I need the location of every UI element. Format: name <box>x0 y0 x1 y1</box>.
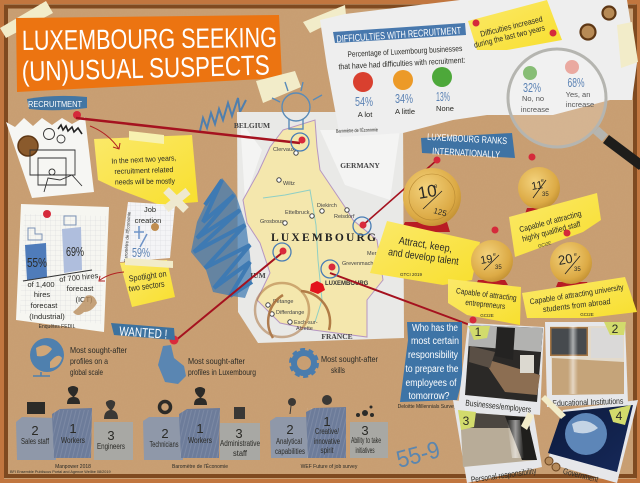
map: city names: Alzette <box>296 326 313 332</box>
block: creative innovative spirit: 1 <box>323 414 331 429</box>
icon: team <box>356 406 374 417</box>
medal: 11th of 35 <box>518 154 560 214</box>
icon: admin <box>234 407 245 419</box>
note tape <box>125 258 173 268</box>
scribble: 55-9: 55-9 <box>394 436 443 474</box>
wanted banner: WANTED ! <box>119 323 168 342</box>
icon: worker 1 <box>67 386 80 404</box>
tape: top centre <box>303 5 346 33</box>
text: global profiles <box>70 345 127 377</box>
icon: orange face <box>393 70 413 90</box>
stat: a lot: A lot <box>358 110 373 119</box>
source: Deloitte Millennials Survey <box>398 404 457 410</box>
tape: over title <box>256 71 301 103</box>
block: technicians <box>143 417 183 460</box>
block: workers: Workers <box>61 436 85 445</box>
pin: chart <box>43 210 51 218</box>
note text <box>111 153 177 187</box>
map: river <box>263 190 322 322</box>
arrow: to yellow note <box>90 126 120 149</box>
chart labels: of 1,400 <box>27 280 55 289</box>
job creation paper: 59% <box>132 245 150 260</box>
bar icons <box>28 216 76 240</box>
stat: none: None <box>436 104 454 113</box>
red strings <box>76 118 470 341</box>
block: engineers: 3 <box>107 428 115 443</box>
panel: who has the most responsibility: responsibility <box>408 350 458 361</box>
yellow note: highly qualified staff: GCI2E <box>537 240 552 249</box>
block: creative innovative spirit: Creative/ <box>315 427 340 436</box>
photo: government <box>547 400 638 483</box>
magnifier <box>508 49 640 166</box>
source: Baromètre de l'Économie <box>336 126 378 135</box>
stat: no increase <box>521 80 549 114</box>
title line 2: (UN)USUAL SUSPECTS <box>21 50 270 87</box>
map pins with blue circles <box>170 133 371 344</box>
yellow note: highly qualified staff: Capable of attracting <box>518 209 582 234</box>
coffee stain <box>18 136 38 156</box>
chart labels: of 700 hires <box>59 271 99 284</box>
number tag: 3 <box>463 414 470 428</box>
medal: 20th of 35 <box>550 230 592 287</box>
map: city names: Mer <box>367 251 377 257</box>
lens <box>508 49 606 147</box>
job creation paper: Job <box>144 205 156 214</box>
block: workers: Workers <box>188 436 212 445</box>
chart labels: (ICT) <box>75 295 93 304</box>
source: Baromètre de l'Économie <box>172 463 228 470</box>
photo: educational institutions <box>545 322 628 408</box>
photo: businesses / employers <box>458 323 544 415</box>
job creation paper: Baromètre de l'Économie <box>122 211 132 262</box>
icon: green face <box>432 67 452 87</box>
title banner <box>16 15 282 92</box>
panel: who has the most responsibility: tomorrow? <box>408 391 450 402</box>
stat: a lot: 54% <box>355 94 373 109</box>
map: city markers <box>266 151 349 324</box>
title line 1: LUXEMBOURG SEEKING <box>22 22 277 56</box>
map: country area <box>243 120 383 337</box>
map: country labels <box>234 121 380 341</box>
copyright line: BFI Ensemble Publiscus Portal and Agence Wellbe 08/2019 <box>10 470 111 474</box>
chart source: Enquêtes FEDIL <box>39 324 76 330</box>
subtitle <box>338 44 466 71</box>
stat: no increase: No, no <box>522 94 544 103</box>
map: city names: Diekirch <box>317 203 337 209</box>
medal: 19th of 35: 35 <box>495 265 502 271</box>
label: Luxembourg ranks internationally: INTERNATIONALLY <box>432 146 501 161</box>
medal: 20th of 35: 20 <box>557 251 574 268</box>
block: administrative staff: 3 <box>235 426 243 441</box>
sketch people <box>30 128 82 192</box>
block: engineers: Engineers <box>97 442 125 451</box>
bar: industrial 55% <box>25 243 47 280</box>
label: Luxembourg ranks internationally: LUXEMBOURG RANKS <box>427 132 507 147</box>
yellow note: highly qualified staff: highly qualified staff <box>521 219 582 244</box>
recruitment label <box>27 96 87 110</box>
panel: who has the most responsibility: employees of <box>406 378 457 389</box>
stat: no increase: 32% <box>523 80 541 95</box>
map: city names: Differdange <box>276 310 304 316</box>
number tag: 2 <box>612 322 619 336</box>
header band: DIFFICULTIES WITH RECRUITMENT <box>336 26 462 45</box>
medal: 10th of 125: 125 <box>432 206 448 219</box>
map: city names: Clervaux <box>273 147 295 153</box>
medal: 20th of 35: e <box>574 252 577 258</box>
caption: Businesses/employers <box>465 398 532 414</box>
job creation paper: creation <box>135 216 161 225</box>
yellow note: spotlight: two sectors <box>128 279 165 293</box>
job creation paper <box>120 202 175 262</box>
chart labels <box>27 271 99 321</box>
map label: Belgium fragment over scribble: IUM <box>250 271 266 280</box>
chart labels: forecast <box>31 301 58 310</box>
chart values: 55% <box>27 255 47 270</box>
pin: recruitment <box>73 111 81 119</box>
yellow note: Attract, keep, develop: GTCI 2019 <box>400 272 422 277</box>
yellow note: university students <box>522 277 637 318</box>
tape: between photos <box>521 395 566 430</box>
block: creative innovative spirit <box>306 407 346 458</box>
text: skills: skills <box>331 365 345 375</box>
medal: 10th of 125: e <box>434 184 438 190</box>
yellow note: entrepreneurs <box>448 279 521 325</box>
sketch scribble <box>58 125 82 134</box>
map: city names: Ettelbruck <box>285 210 310 216</box>
block: workers: 1 <box>69 421 77 436</box>
map: country labels: GERMANY <box>340 161 380 170</box>
icon: Luxembourg shape <box>158 345 186 384</box>
stat: yes increase: Yes, an <box>566 90 590 99</box>
stat: none <box>436 89 454 113</box>
icon: green face <box>523 66 537 80</box>
yellow note: spotlight <box>120 258 175 307</box>
block: sales staff: 2 <box>31 423 39 438</box>
yellow note: difficulties increased <box>468 0 562 50</box>
block: initiatives <box>350 422 388 458</box>
block: analytical capabilities: capabilities <box>275 447 305 456</box>
yellow note: difficulties increased: Difficulties increased <box>479 14 544 39</box>
subtitle: that have had difficulties with recruitment: <box>338 56 466 71</box>
medal: 19th of 35: 19 <box>479 253 494 267</box>
tape: top left <box>0 1 53 38</box>
map: city names: Esch-sur- <box>294 320 318 326</box>
medal: 11th of 35: 35 <box>542 192 549 198</box>
bar: ICT 69% <box>62 227 82 273</box>
map: city names: Pétange <box>273 299 294 305</box>
icon: gear <box>290 350 318 376</box>
block: workers: 1 <box>196 421 204 436</box>
medal: 10th of 125 <box>400 156 461 232</box>
icon: worker 2 <box>194 387 207 405</box>
stat: a lot <box>355 94 373 119</box>
podium: Manpower <box>16 386 133 470</box>
chart labels: hires <box>34 290 50 299</box>
podium: WEF <box>270 395 388 470</box>
stat: none: 13% <box>436 89 450 104</box>
handle <box>596 130 640 166</box>
stat: yes increase: increase <box>566 100 594 109</box>
block: creative innovative spirit: innovative <box>314 437 340 446</box>
chart baseline <box>23 270 92 281</box>
block: analytical capabilities <box>270 417 310 458</box>
icon: red face <box>353 72 373 92</box>
block: administrative staff <box>220 423 260 460</box>
icon: lightbulb sketch <box>272 82 322 129</box>
note tape <box>129 131 164 144</box>
note text: recruitment related <box>114 165 174 176</box>
text: skills <box>321 354 378 375</box>
medal: 11th of 35: 11 <box>530 179 544 193</box>
number tag: 1 <box>475 325 482 339</box>
yellow note: spotlight: Spotlight on <box>128 268 167 284</box>
panel: who has the most responsibility: Who has the <box>412 323 458 334</box>
stat: yes increase <box>566 75 594 109</box>
text: Luxembourg profiles <box>188 356 256 377</box>
yellow note: highly qualified staff <box>509 193 601 257</box>
map of Luxembourg <box>234 112 404 343</box>
block: technicians: Technicians <box>150 440 178 449</box>
tape: cross <box>166 190 188 210</box>
panel: who has the most responsibility <box>398 322 462 410</box>
source: WEF Future of job survey <box>301 464 358 470</box>
map: Luxembourg label: LUXEMBOURG <box>271 232 376 244</box>
block: initiatives: initiatives <box>356 446 374 455</box>
medal: 11th of 35: e <box>541 178 544 184</box>
yellow note: entrepreneurs: GCI2E <box>480 313 494 318</box>
map: country labels: BELGIUM <box>234 121 270 130</box>
panel: difficulties with recruitment <box>320 0 637 137</box>
map: crumple highlights <box>240 120 400 200</box>
text: skills: Most sought-after <box>321 354 378 364</box>
yellow note: entrepreneurs: Capable of attracting <box>455 286 517 303</box>
panel: who has the most responsibility: to prepare the <box>406 364 459 375</box>
block: technicians: 2 <box>161 426 169 441</box>
tape: right <box>617 22 638 68</box>
block: creative innovative spirit: spirit <box>320 446 334 455</box>
chart labels: forecast <box>67 284 94 293</box>
label: Luxembourg ranks internationally <box>421 132 515 161</box>
note text: needs will be mostly <box>115 176 175 187</box>
coffee stains: top right <box>580 6 616 40</box>
subtitle: Percentage of Luxembourg businesses <box>347 44 463 59</box>
map: city names <box>260 147 379 332</box>
map: coffee rings <box>255 283 330 338</box>
map: country labels: FRANCE <box>321 332 353 341</box>
panel: who has the most responsibility: most certain <box>411 336 459 347</box>
map: capital marker <box>310 281 325 294</box>
scribble: blue zigzag above map <box>200 98 246 131</box>
chart labels: (Industrial) <box>29 312 65 321</box>
block: initiatives: Ability to take <box>351 436 381 445</box>
block: analytical capabilities: 2 <box>286 422 294 437</box>
map: city names: Wiltz <box>283 181 295 187</box>
number tag: 4 <box>616 409 623 423</box>
note text: In the next two years, <box>111 153 177 166</box>
stain <box>151 223 159 231</box>
stat: a little <box>395 91 415 116</box>
arrow: to chart <box>99 272 124 281</box>
stat: a little: A little <box>395 107 415 116</box>
stat: no increase: increase <box>521 105 549 114</box>
icon: engineer <box>104 400 118 419</box>
yellow note: Attract, keep, develop <box>370 221 480 285</box>
yellow note: Attract, keep, develop: and develop talent <box>387 246 459 268</box>
source: Manpower 2018 <box>55 464 91 470</box>
cork pins near government <box>545 457 560 471</box>
block: analytical capabilities: Analytical <box>276 437 302 446</box>
map: city names: LUXEMBOURG <box>325 281 369 287</box>
medal: 19th of 35 <box>471 226 513 285</box>
block: workers <box>52 408 92 458</box>
icon: technician gear <box>160 402 170 412</box>
text: global profiles: profiles on a <box>70 356 108 366</box>
block: administrative staff: staff <box>233 449 248 458</box>
yellow note: Attract, keep, develop: Attract, keep, <box>398 235 453 255</box>
icon: analysis <box>288 398 296 414</box>
icon: tools <box>134 226 147 247</box>
scribble: blue shading left of map <box>191 178 252 298</box>
photo: personal responsibility <box>453 400 542 483</box>
block: administrative staff: Administrative <box>220 439 260 448</box>
icon: sales <box>27 402 45 414</box>
caption: Educational Institutions <box>552 396 624 408</box>
block: sales staff: Sales staff <box>21 437 50 446</box>
icon: globe <box>30 338 64 376</box>
yellow note: recruitment needs <box>94 131 198 205</box>
icon: idea <box>322 395 332 405</box>
pin: photo 1 <box>470 316 476 324</box>
block: sales staff <box>16 417 56 460</box>
recruitment label: RECRUITMENT <box>28 99 82 109</box>
block: workers <box>179 408 220 458</box>
map: city names: Grevenmacher <box>342 261 379 267</box>
yellow note: university students: students from abroad <box>542 297 611 314</box>
chart paper: hires forecast <box>16 204 109 332</box>
text: global profiles: global scale <box>70 367 103 377</box>
stat: a little: 34% <box>395 91 413 106</box>
text: Luxembourg profiles: Most sought-after <box>188 356 245 366</box>
text: Luxembourg profiles: profiles in Luxembourg <box>188 367 256 377</box>
block: initiatives: 3 <box>361 423 369 438</box>
coffee splash <box>73 295 97 315</box>
map: city names: Grosbous <box>260 219 284 225</box>
icon: pink face <box>565 60 579 74</box>
map: city names: Reisdorf <box>334 214 355 220</box>
medal: 19th of 35: e <box>493 252 496 258</box>
text: global profiles: Most sought-after <box>70 345 127 355</box>
sketch paper: interview illustration <box>6 117 94 198</box>
yellow note: university students: Capable of attracting university <box>529 283 624 306</box>
medal: 10th of 125: 10 <box>416 181 438 203</box>
chart paper: hires forecast: 69% <box>66 244 84 259</box>
podium: Baromètre <box>143 387 260 470</box>
medal: 20th of 35: 35 <box>574 267 581 273</box>
yellow note: difficulties increased: during the last two years <box>473 23 546 50</box>
stat: yes increase: 68% <box>568 75 585 90</box>
block: engineers <box>94 422 133 460</box>
yellow note: entrepreneurs: entrepreneurs <box>465 298 506 311</box>
yellow note: university students: GCI2E <box>580 312 594 317</box>
